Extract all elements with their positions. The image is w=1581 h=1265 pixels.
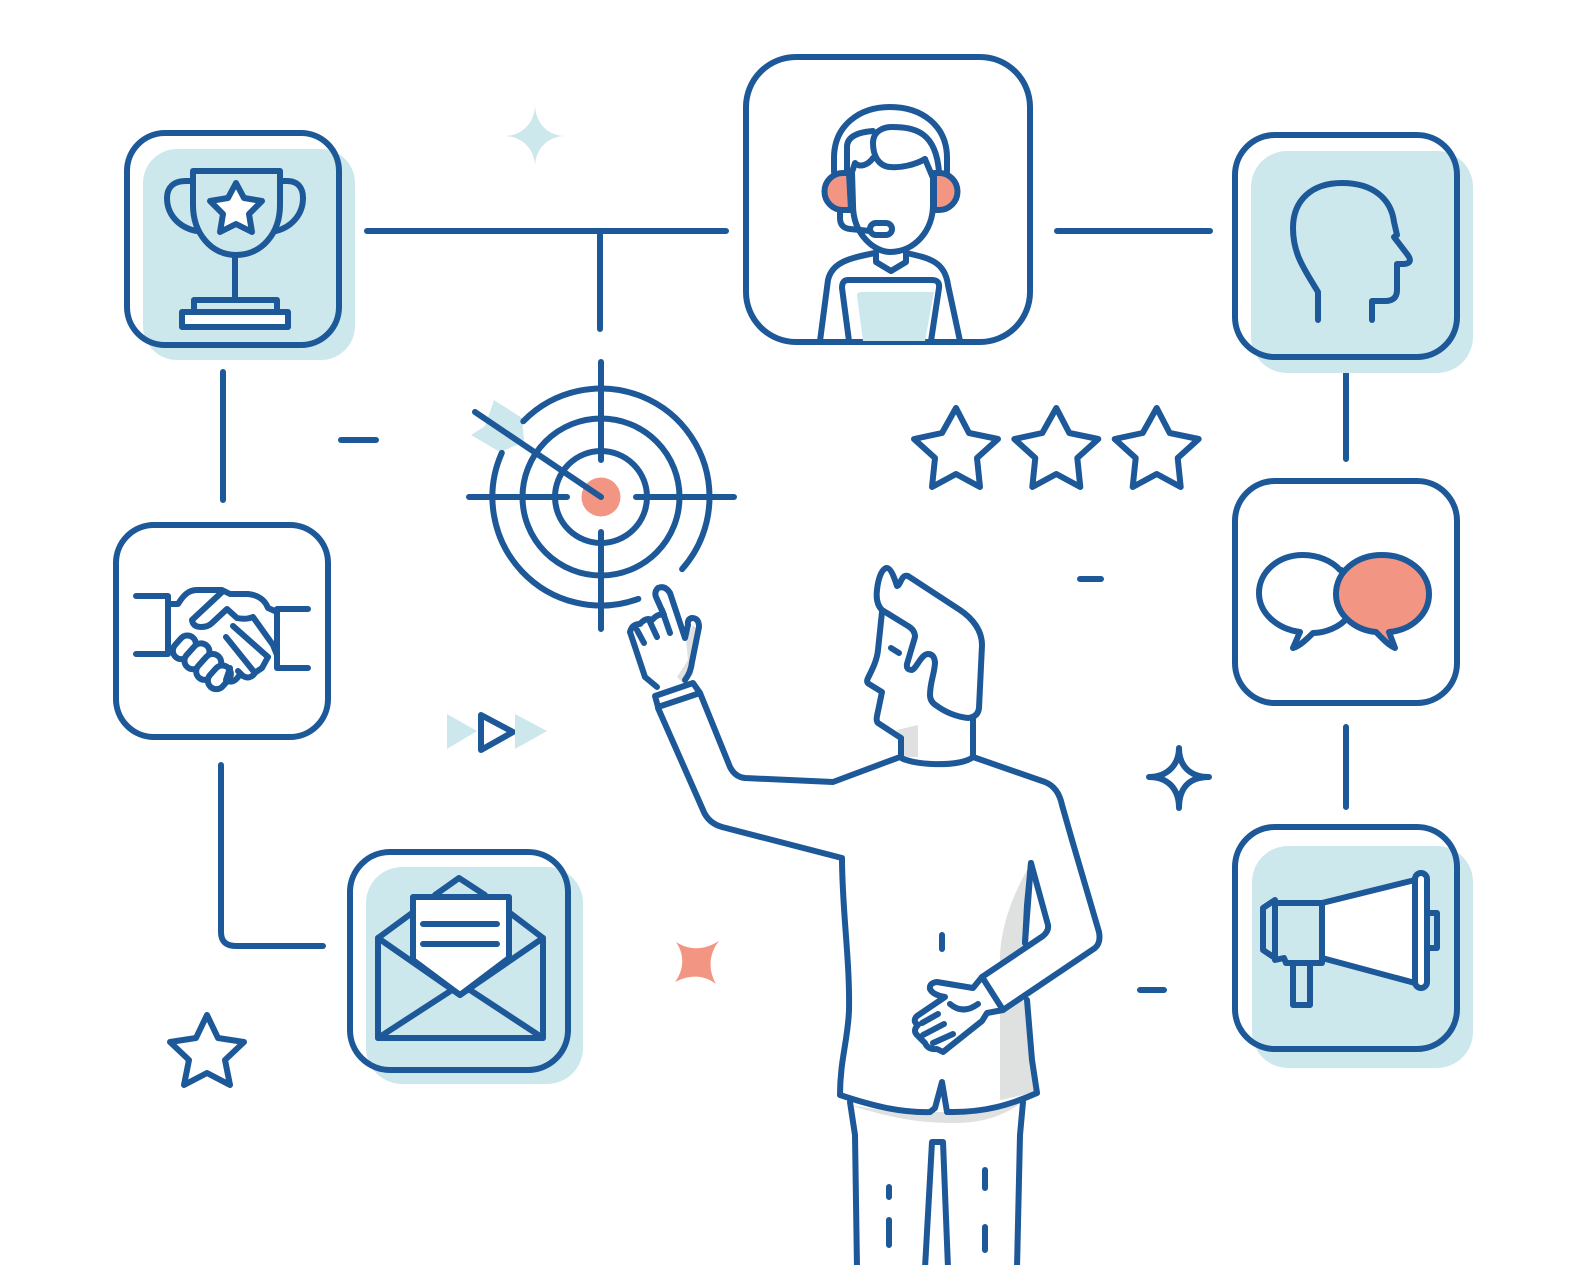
icon panel: human head profile — [1235, 135, 1473, 373]
arrow feathers — [471, 400, 524, 452]
arrows: play triangles — [447, 714, 547, 750]
icon: agent figure — [820, 107, 960, 341]
icon: trophy cup — [167, 171, 303, 327]
laptop screen fill — [857, 292, 934, 341]
icon: salmon speech bubble — [1336, 555, 1429, 648]
connector lines — [221, 231, 1346, 990]
icon panel: chat bubbles — [1235, 481, 1457, 703]
sparkle: salmon — [675, 941, 719, 984]
chart: target with arrow — [469, 362, 734, 629]
trousers — [850, 1102, 1023, 1265]
icon panel: handshake — [116, 525, 328, 737]
icon panel: support agent with headset — [746, 57, 1030, 342]
shading — [677, 625, 1037, 1123]
icon: envelope — [378, 878, 543, 1038]
icon: handshake — [136, 590, 308, 693]
sparkle: light blue — [504, 104, 565, 167]
bullseye — [582, 478, 620, 516]
lower arm behind back — [915, 840, 1100, 1052]
icon panel: megaphone — [1235, 827, 1473, 1068]
raised hand — [630, 587, 700, 707]
icon panel: envelope with letter — [350, 852, 583, 1084]
torso and raised arm — [658, 693, 1072, 1112]
icon panel: trophy — [127, 133, 355, 360]
icon: head — [1293, 183, 1410, 320]
icon: megaphone — [1263, 873, 1437, 1005]
sparkle: outlined — [1149, 748, 1209, 808]
star lower left — [170, 1015, 244, 1085]
head and hair — [867, 568, 982, 757]
person pointing at target — [630, 568, 1100, 1265]
stars rating — [914, 408, 1199, 487]
icon: white speech bubble — [1259, 555, 1349, 648]
tick mark — [939, 935, 945, 949]
